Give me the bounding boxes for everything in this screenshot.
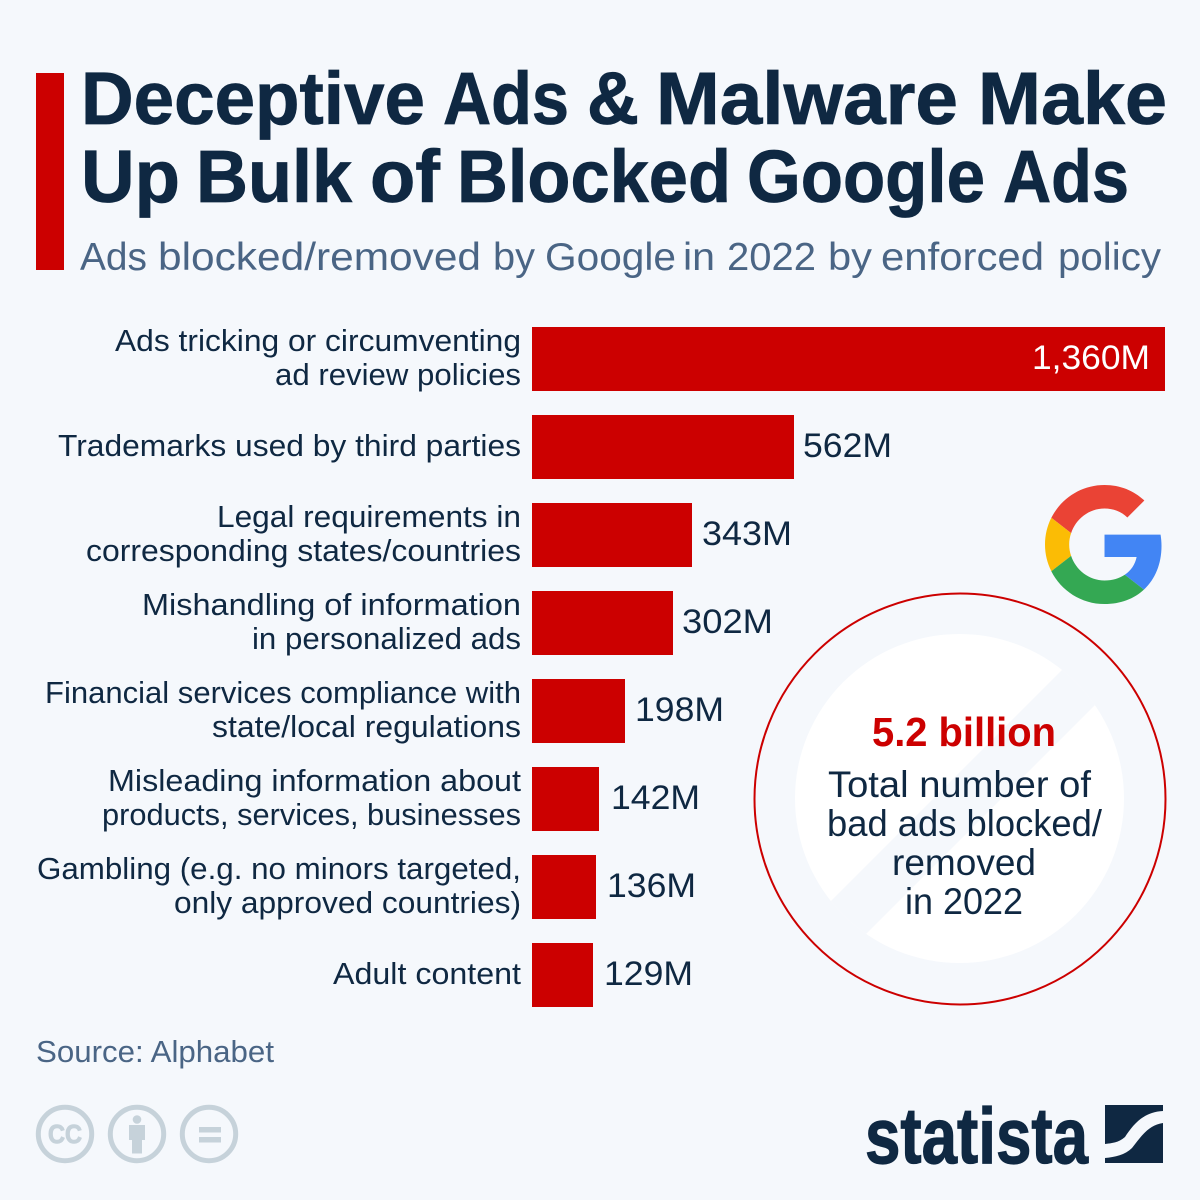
title: Malware (656, 57, 958, 140)
row: personalized ads: 302M (682, 603, 773, 641)
row: personalized ads: Mishandling of information (142, 588, 521, 622)
title: Make (978, 57, 1167, 140)
row: gambling: 136M (607, 867, 696, 905)
subtitle: enforced (881, 236, 1044, 279)
title (81, 57, 1167, 218)
row: gambling: only approved countries) (174, 886, 521, 920)
title: Up (81, 135, 180, 218)
row: gambling: Gambling (e.g. no minors targeted, (37, 852, 521, 886)
row: legal requirements: Legal requirements in (217, 500, 521, 534)
icon: statista logo (1105, 1105, 1163, 1163)
row: personalized ads: in personalized ads (252, 622, 521, 656)
row: legal requirements: 343M (702, 515, 792, 553)
title: Ads (443, 57, 569, 140)
row: ad review policies: 1,360M (1032, 339, 1150, 377)
row: trademarks (58, 415, 892, 479)
row: personalized ads (142, 588, 773, 656)
row: adult content: 129M (604, 955, 693, 993)
callout description: Total number of (828, 764, 1092, 805)
row: misleading information (102, 764, 700, 832)
bar chart (37, 324, 1165, 1007)
title: Google (747, 135, 985, 218)
subtitle: policy (1058, 236, 1162, 279)
title: & (587, 57, 639, 140)
subtitle: Google (545, 236, 676, 279)
row: ad review policies: ad review policies (275, 358, 521, 392)
row: legal requirements (86, 500, 792, 568)
icon: attribution (110, 1107, 164, 1161)
row: trademarks: 562M (803, 427, 892, 465)
icon: google logo (1045, 485, 1162, 604)
callout description: in 2022 (905, 881, 1023, 922)
callout description: bad ads blocked/ (827, 803, 1103, 844)
title: Ads (1003, 135, 1129, 218)
icon: cc license (38, 1107, 92, 1161)
callout description: removed (892, 842, 1036, 883)
title: Deceptive (81, 57, 425, 140)
title: of (370, 135, 440, 218)
row: adult content (333, 943, 693, 1007)
icon: prohibition circle (754, 592, 1166, 1006)
subtitle: blocked/removed (158, 236, 481, 279)
row: financial services: state/local regulations (212, 710, 521, 744)
title: Blocked (457, 135, 731, 218)
subtitle: by (828, 236, 873, 279)
statista wordmark: statista (865, 1091, 1089, 1180)
row: legal requirements: corresponding states/countries (86, 534, 521, 568)
title: Bulk (196, 135, 353, 218)
icon: cc license: CC (48, 1119, 82, 1149)
row: financial services (45, 676, 724, 744)
row: adult content: Adult content (333, 957, 522, 991)
accent bar (36, 73, 64, 270)
row: trademarks: Trademarks used by third parties (58, 429, 521, 463)
subtitle (80, 236, 1162, 279)
icon: no derivatives (182, 1107, 236, 1161)
callout: total bad ads (754, 592, 1166, 1006)
row: financial services: 198M (635, 691, 724, 729)
subtitle: by (493, 236, 535, 279)
subtitle: in (683, 236, 715, 279)
row: financial services: Financial services compliance with (45, 676, 521, 710)
row: gambling (37, 852, 696, 920)
row: misleading information: Misleading information about (108, 764, 522, 798)
callout description (827, 764, 1103, 922)
row: ad review policies: Ads tricking or circumventing (115, 324, 521, 358)
callout figure: 5.2 billion (872, 709, 1056, 755)
row: misleading information: 142M (611, 779, 700, 817)
source: Source: Alphabet (36, 1035, 275, 1069)
subtitle: 2022 (727, 236, 816, 279)
subtitle: Ads (80, 236, 147, 279)
row: misleading information: products, services, businesses (102, 798, 521, 832)
row: ad review policies (115, 324, 1165, 392)
